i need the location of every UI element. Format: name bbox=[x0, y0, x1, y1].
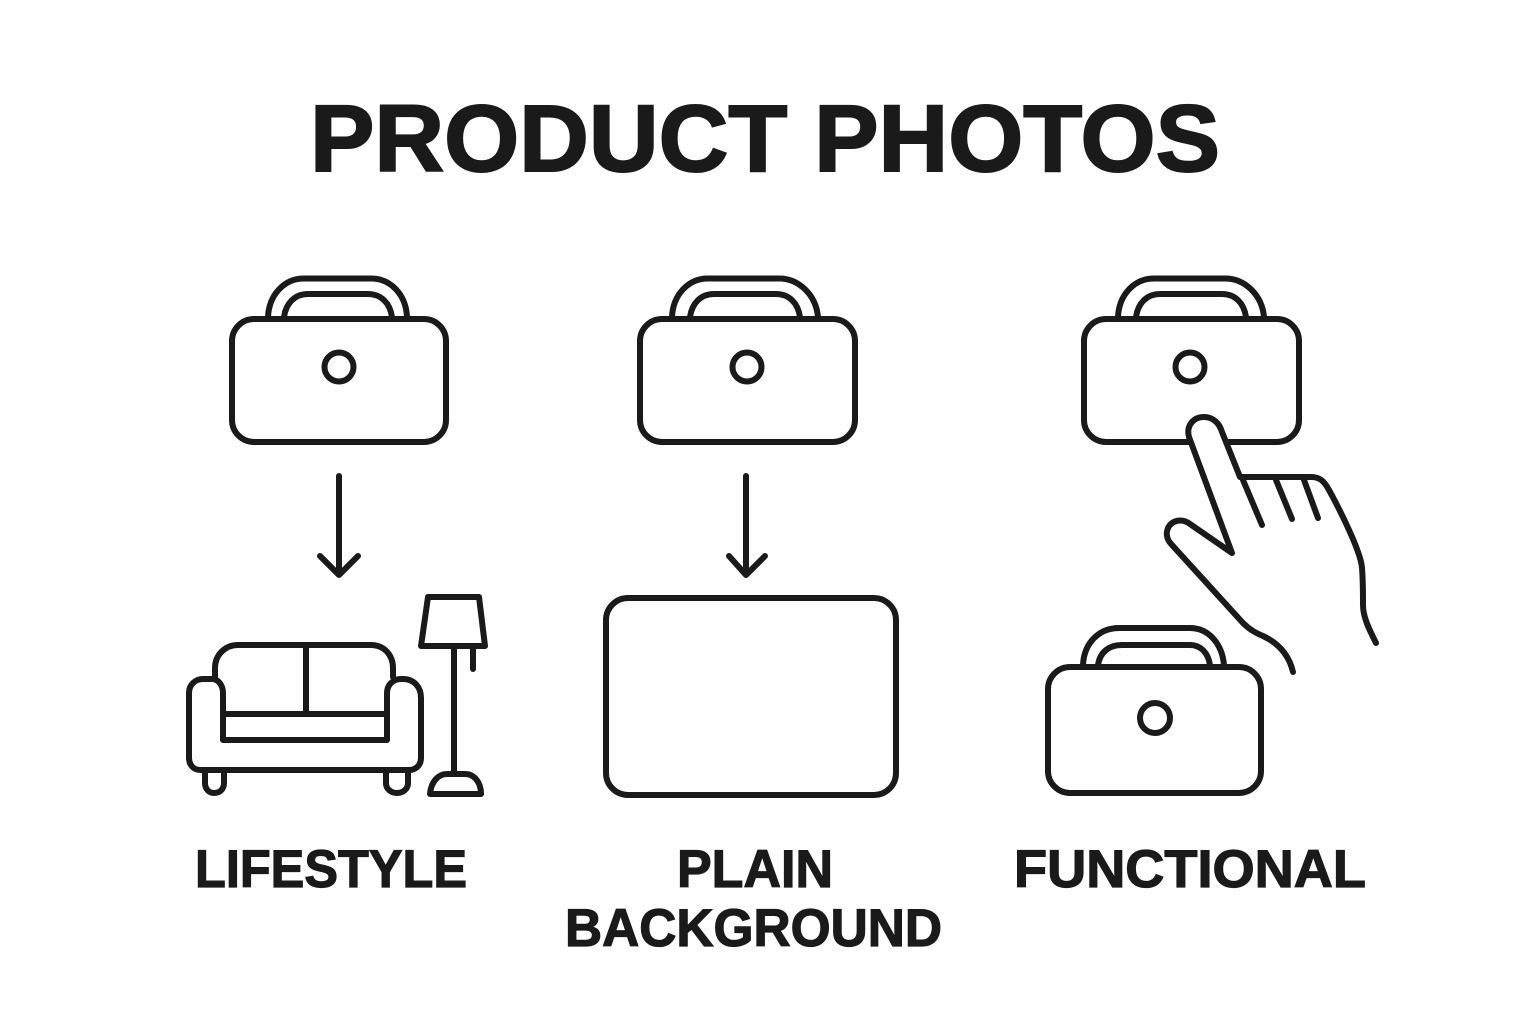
icon: product bag (lifestyle) bbox=[232, 278, 446, 442]
panel: lifestyle bbox=[189, 278, 485, 899]
label: plain background: BACKGROUND bbox=[565, 899, 942, 958]
icon: product bag (plain background) bbox=[640, 278, 855, 442]
icon: blank background rectangle bbox=[606, 598, 896, 795]
arrow: bag to lifestyle scene bbox=[320, 476, 358, 575]
title: PRODUCT PHOTOS bbox=[310, 86, 1220, 192]
label: lifestyle: LIFESTYLE bbox=[195, 840, 467, 899]
label: plain background: PLAIN bbox=[677, 840, 833, 899]
icon: sofa bbox=[189, 645, 421, 793]
label: functional: FUNCTIONAL bbox=[1014, 840, 1366, 899]
panel: plain background bbox=[565, 278, 942, 958]
icon: product bag (bottom) bbox=[1048, 628, 1261, 793]
label: plain background bbox=[565, 840, 942, 958]
icon: product bag (top) bbox=[1084, 278, 1299, 442]
panel: functional bbox=[1014, 278, 1376, 899]
icon: pointing hand bbox=[1167, 417, 1376, 672]
arrow: bag to plain background bbox=[729, 476, 765, 575]
icon: floor lamp bbox=[421, 597, 485, 794]
